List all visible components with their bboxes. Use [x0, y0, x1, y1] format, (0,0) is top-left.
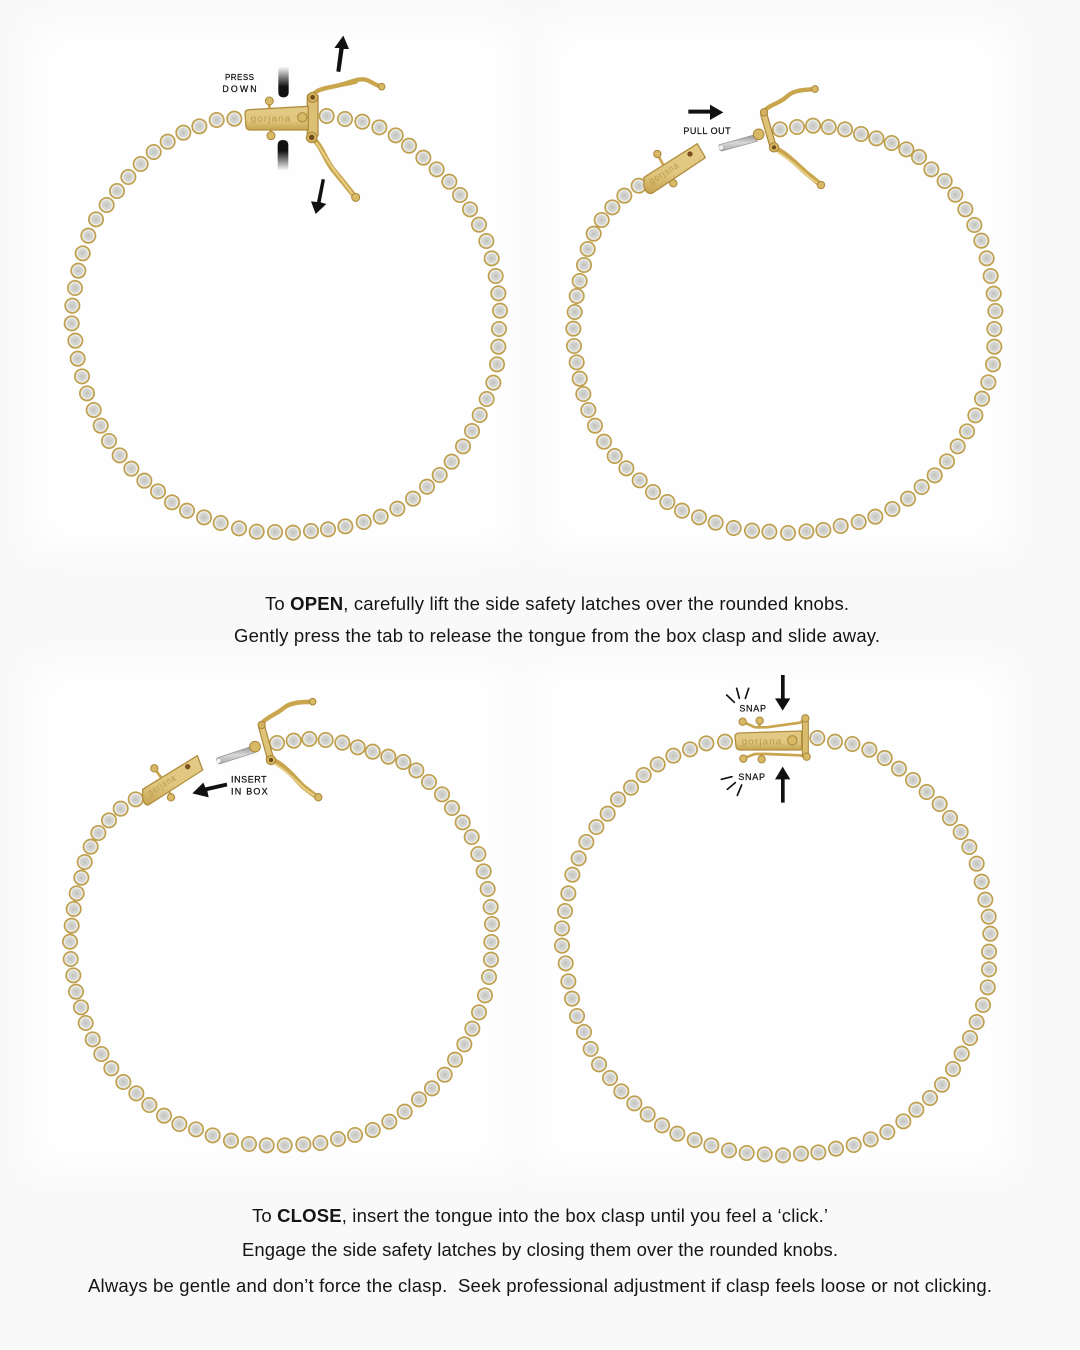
clasp 4 closed [735, 715, 810, 763]
arrow right [688, 105, 723, 120]
label: insert in box: INSERT [231, 774, 267, 784]
bracelet 1 beads [72, 116, 500, 533]
clasp 4 closed: gorjana [742, 736, 782, 746]
arrow left [192, 783, 227, 797]
open line 2: Gently press the tab to release the tongue from the box clasp and slide away. [234, 625, 880, 646]
bracelet 2 beads [573, 126, 995, 533]
label: snap top: SNAP [739, 704, 766, 714]
arrow down [311, 179, 326, 214]
open line 1: To OPEN, carefully lift the side safety latches over the rounded knobs. [265, 593, 849, 614]
background panels [30, 25, 1010, 1170]
clasp 2 box and tongue: gorjana [647, 160, 681, 186]
text block: open instructions [234, 593, 880, 646]
clasp 3 box and tongue [143, 698, 322, 805]
label: snap bottom [721, 772, 765, 795]
bracelet 3 beads [70, 739, 492, 1145]
label: press down: DOWN [222, 84, 257, 94]
close line 3: Always be gentle and don’t force the clasp. Seek professional adjustment if clasp feels loose or not clicking. [88, 1275, 992, 1296]
label: press down [222, 73, 257, 94]
label: snap top [727, 688, 766, 714]
panel: step 3 insert in box [70, 698, 492, 1145]
label: snap bottom: SNAP [738, 772, 765, 782]
arrow up [334, 36, 349, 72]
label: press down: PRESS [225, 73, 254, 82]
close line 1: To CLOSE, insert the tongue into the box clasp until you feel a ‘click.’ [252, 1205, 828, 1226]
clasp 3 box and tongue: gorjana [146, 772, 178, 798]
panel: step 4 snap closed [562, 675, 990, 1155]
close line 2: Engage the side safety latches by closing them over the rounded knobs. [242, 1239, 838, 1260]
clasp 1 with latches open [245, 79, 385, 201]
arrow up bottom [775, 767, 790, 803]
panel: step 2 pull out [573, 86, 995, 533]
arrow down top [775, 675, 790, 711]
text block: close instructions [88, 1205, 992, 1296]
press down bars [278, 67, 289, 171]
label: insert in box: IN BOX [231, 786, 268, 796]
panel: step 1 press down [72, 36, 500, 533]
label: pull out: PULL OUT [683, 126, 731, 136]
clasp 2 box and tongue [644, 86, 825, 193]
clasp 1 with latches open: gorjana [251, 114, 291, 124]
label: insert in box [231, 774, 268, 796]
bracelet 4 beads [562, 738, 990, 1155]
